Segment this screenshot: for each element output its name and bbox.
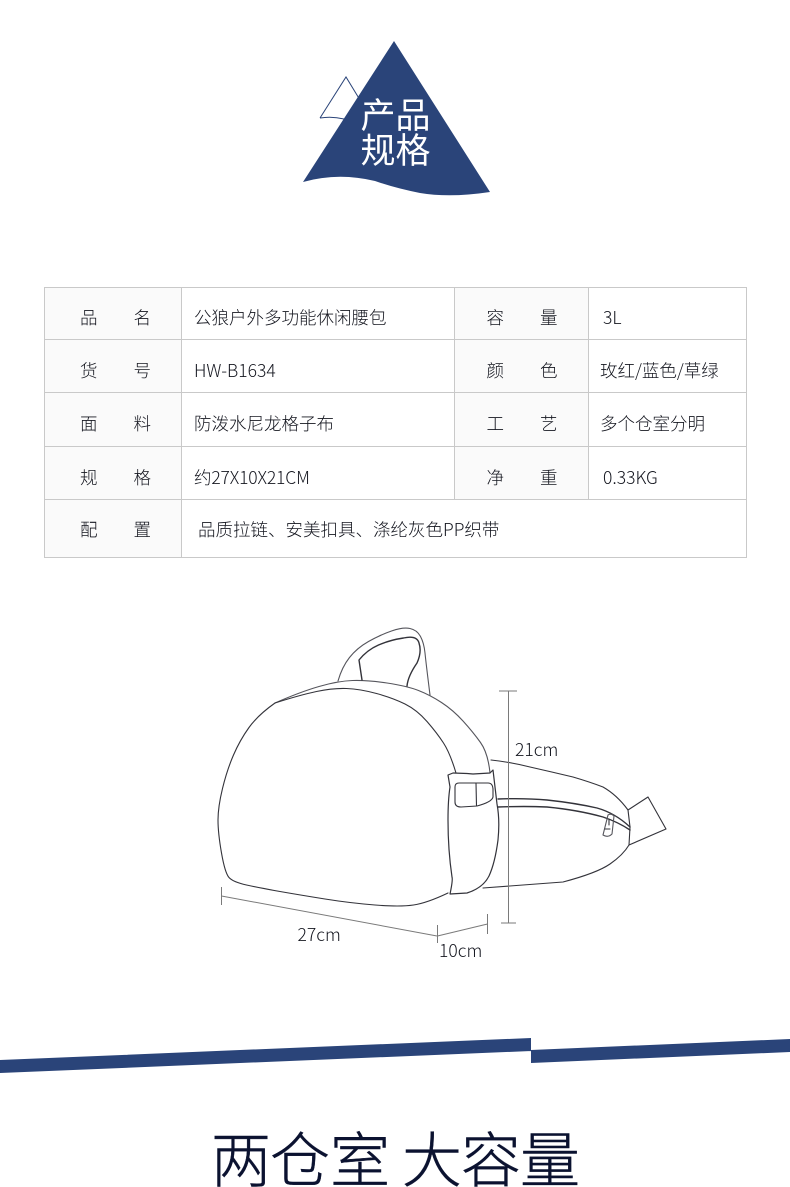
dimension: length 27cm: 27cm (298, 922, 341, 947)
table row: fabric and craft (45, 393, 746, 447)
table row: configuration: 配 (80, 517, 98, 542)
table row: product name and capacity: 公狼户外多功能休闲腰包 (194, 305, 386, 330)
title: 产品规格: 产品 (360, 88, 431, 139)
table row: item number and colour: 玫红/蓝色/草绿 (600, 358, 719, 382)
table row: configuration: 置 (134, 517, 151, 542)
table row: product name and capacity: 名 (134, 305, 151, 330)
table row: size and net weight: 规 (80, 464, 98, 490)
table row: size and net weight: 净 (486, 464, 504, 490)
table row: fabric and craft: 艺 (540, 411, 558, 436)
table row: item number and colour: HW-B1634 (194, 358, 276, 382)
dimension: height 21cm (499, 691, 558, 923)
icon: large navy mountain (303, 41, 490, 195)
table row: item number and colour: 货 (80, 358, 98, 382)
table row: product name and capacity: 量 (540, 305, 558, 330)
table row: configuration: 品质拉链、安美扣具、涤纶灰色PP织带 (198, 517, 499, 542)
table row: configuration (80, 500, 499, 557)
table row: fabric and craft: 料 (134, 411, 151, 436)
dimension: width 10cm: 10cm (439, 938, 482, 963)
table row: fabric and craft: 面 (80, 411, 98, 436)
table row: size and net weight: 约27X10X21CM (194, 464, 310, 490)
table row: product name and capacity (45, 288, 746, 340)
table row: item number and colour: 颜 (486, 358, 504, 382)
heading: 两仓室 大容量 (211, 1123, 580, 1187)
table row: item number and colour: 号 (134, 358, 151, 382)
table row: fabric and craft: 工 (486, 411, 504, 436)
dimension: height 21cm: 21cm (515, 737, 558, 762)
table row: size and net weight: 格 (134, 464, 151, 490)
icon: small outlined mountain (320, 77, 360, 119)
icon: mountain logo with section title (303, 41, 490, 196)
dimension: length 27cm (222, 887, 437, 947)
divider: slanted navy bars (0, 1038, 790, 1073)
table row: product name and capacity: 3L (603, 305, 622, 330)
illustration: waist bag outline (218, 628, 666, 906)
table row: product name and capacity: 品 (80, 305, 98, 330)
table row: item number and colour: 色 (540, 358, 558, 382)
dimension: width 10cm (438, 914, 488, 963)
table row: size and net weight: 重 (540, 464, 558, 490)
title: 产品规格 (360, 88, 431, 174)
table row: fabric and craft: 防泼水尼龙格子布 (194, 411, 334, 436)
table row: fabric and craft: 多个仓室分明 (600, 411, 705, 436)
diagram: waist bag line drawing with dimensions (217, 628, 666, 963)
table row: size and net weight (45, 447, 746, 500)
specification table (44, 287, 747, 558)
title: 产品规格: 规格 (360, 123, 431, 174)
table row: item number and colour (45, 340, 746, 393)
table row: product name and capacity: 容 (486, 305, 504, 330)
table row: size and net weight: 0.33KG (603, 464, 658, 490)
